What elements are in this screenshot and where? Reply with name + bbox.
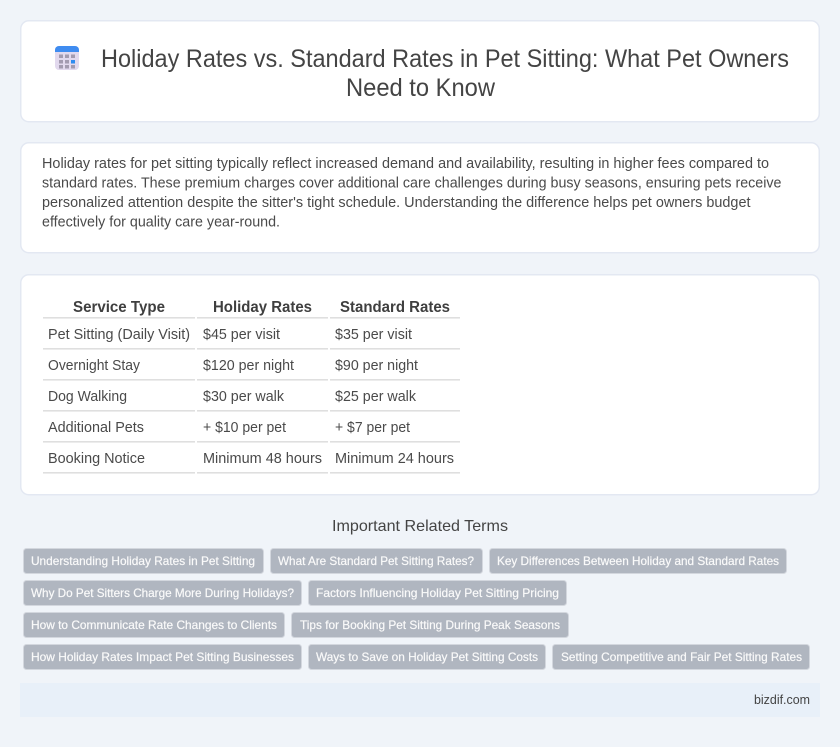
table header: Holiday Rates (213, 299, 312, 316)
table row: dog walking: Dog Walking (48, 389, 127, 405)
tag: Understanding Holiday Rates in Pet Sitting (31, 554, 255, 568)
table row: booking notice: Booking Notice (48, 451, 145, 467)
table row: dog walking (43, 389, 460, 412)
panel: title card (21, 21, 819, 122)
footer (20, 683, 820, 717)
tag (24, 548, 264, 574)
text block: summary: personalized attention despite the sitter's tight schedule. Understanding the difference helps pet owners budget (42, 195, 750, 211)
table header: Service Type (73, 299, 165, 316)
tag: Key Differences Between Holiday and Standard Rates (497, 554, 779, 568)
table row: overnight stay (43, 358, 460, 381)
tag (24, 580, 302, 606)
table row: additional pets: + $7 per pet (335, 420, 410, 436)
table header (43, 299, 460, 319)
table row: additional pets: Additional Pets (48, 420, 144, 436)
table row: pet sitting: $35 per visit (335, 327, 412, 343)
tag: Why Do Pet Sitters Charge More During Holidays? (31, 586, 294, 600)
table row: pet sitting: $45 per visit (203, 327, 280, 343)
table row: dog walking: $30 per walk (203, 389, 285, 405)
title (101, 45, 789, 102)
table row: booking notice (43, 451, 460, 474)
panel: related term tags (24, 548, 810, 670)
panel: rates table (21, 275, 819, 495)
table row: overnight stay: Overnight Stay (48, 358, 141, 374)
tag (24, 644, 302, 670)
table row: pet sitting: Pet Sitting (Daily Visit) (48, 327, 190, 343)
tag: Factors Influencing Holiday Pet Sitting Pricing (316, 586, 559, 600)
text block: summary: standard rates. These premium charges cover additional care challenges during busy seasons, ensuring pets receive (42, 176, 782, 192)
text block: summary (42, 156, 782, 230)
text block: summary: Holiday rates for pet sitting typically reflect increased demand and availability, resulting in higher fees compared to (42, 156, 769, 172)
tag: What Are Standard Pet Sitting Rates? (278, 554, 474, 568)
table row: overnight stay: $120 per night (203, 358, 294, 374)
panel: summary paragraph (21, 143, 819, 253)
tag: Setting Competitive and Fair Pet Sitting Rates (561, 650, 802, 664)
text block: summary: effectively for quality care year-round. (42, 214, 280, 230)
tag: How to Communicate Rate Changes to Clients (31, 618, 277, 632)
footer source: bizdif.com (754, 693, 810, 707)
tag (308, 644, 546, 670)
icon: calendar (55, 46, 79, 70)
tag (270, 548, 482, 574)
table row: booking notice: Minimum 24 hours (335, 451, 454, 467)
title: Need to Know (346, 74, 496, 102)
table row: dog walking: $25 per walk (335, 389, 417, 405)
tag: Tips for Booking Pet Sitting During Peak Seasons (300, 618, 560, 632)
table row: overnight stay: $90 per night (335, 358, 418, 374)
table row: pet sitting (43, 327, 460, 350)
tag (292, 612, 568, 638)
tag: Ways to Save on Holiday Pet Sitting Costs (316, 650, 538, 664)
tag (24, 612, 284, 638)
table row: additional pets (43, 420, 460, 443)
tag (308, 580, 566, 606)
table row: additional pets: + $10 per pet (203, 420, 286, 436)
heading: related terms: Important Related Terms (332, 518, 508, 535)
tag (552, 644, 810, 670)
table row: booking notice: Minimum 48 hours (203, 451, 322, 467)
title: Holiday Rates vs. Standard Rates in Pet Sitting: What Pet Owners (101, 45, 789, 73)
tag: How Holiday Rates Impact Pet Sitting Businesses (31, 650, 294, 664)
tag (490, 548, 786, 574)
table header: Standard Rates (340, 299, 450, 316)
